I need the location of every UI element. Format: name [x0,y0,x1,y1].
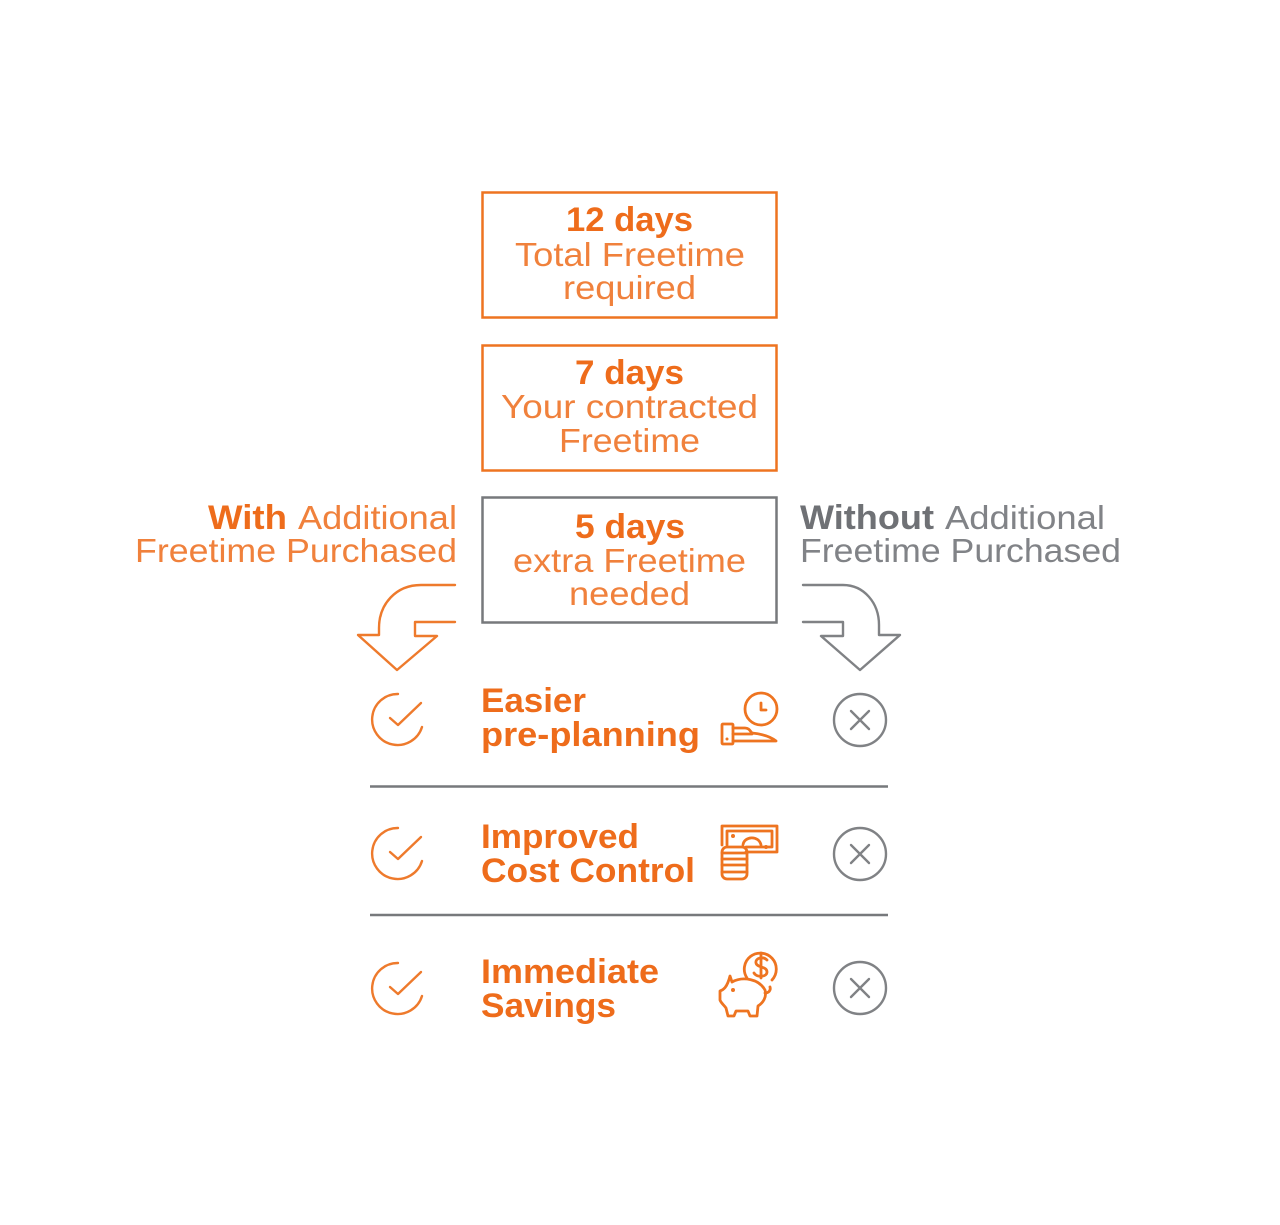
icon: grey x [834,962,886,1014]
label: without additional freetime purchased: Without [800,499,934,537]
text: improved: Improved [481,818,639,856]
icon: orange check [372,828,422,879]
label: without additional freetime purchased: Additional [945,499,1105,536]
box: 12 days total freetime: required [563,269,696,306]
row: easier pre-planning [372,682,886,754]
box: 12 days total freetime: 12 days [566,201,693,239]
icon: grey x [834,828,886,880]
box: 12 days total freetime [482,192,776,318]
box: 7 days contracted freetime: 7 days [575,354,684,392]
text: pre-planning: pre-planning [481,716,700,754]
row: improved cost control [372,818,886,890]
text: immediate: Immediate [481,953,659,991]
label: without additional freetime purchased [800,499,1121,569]
text: savings: Savings [481,987,616,1025]
divider [370,786,888,915]
label: with additional freetime purchased: Freetime Purchased [135,532,457,569]
arrow: orange left down [358,585,455,670]
icon: piggy bank with coin [720,953,776,1016]
box: 5 days extra freetime: needed [569,575,690,612]
icon: hand with clock [722,693,777,744]
box: 12 days total freetime: Total Freetime [515,236,745,273]
label: with additional freetime purchased: Additional [298,499,457,536]
icon: orange check [372,963,422,1014]
box: 5 days extra freetime [482,498,776,622]
icon: orange check [372,694,422,745]
label: with additional freetime purchased: With [208,499,287,537]
text: cost control: Cost Control [481,852,695,890]
box: 7 days contracted freetime: Your contracted [501,388,758,425]
row: immediate savings [372,953,886,1025]
text: easier: Easier [481,682,586,720]
arrow: grey right down [803,585,900,670]
box: 7 days contracted freetime [482,346,776,470]
box: 5 days extra freetime: 5 days [575,508,685,546]
icon: banknote and coins [722,826,777,879]
box: 7 days contracted freetime: Freetime [559,422,700,459]
label: with additional freetime purchased [135,499,457,569]
icon: grey x [834,694,886,746]
label: without additional freetime purchased: Freetime Purchased [800,532,1121,569]
box: 5 days extra freetime: extra Freetime [513,542,746,579]
